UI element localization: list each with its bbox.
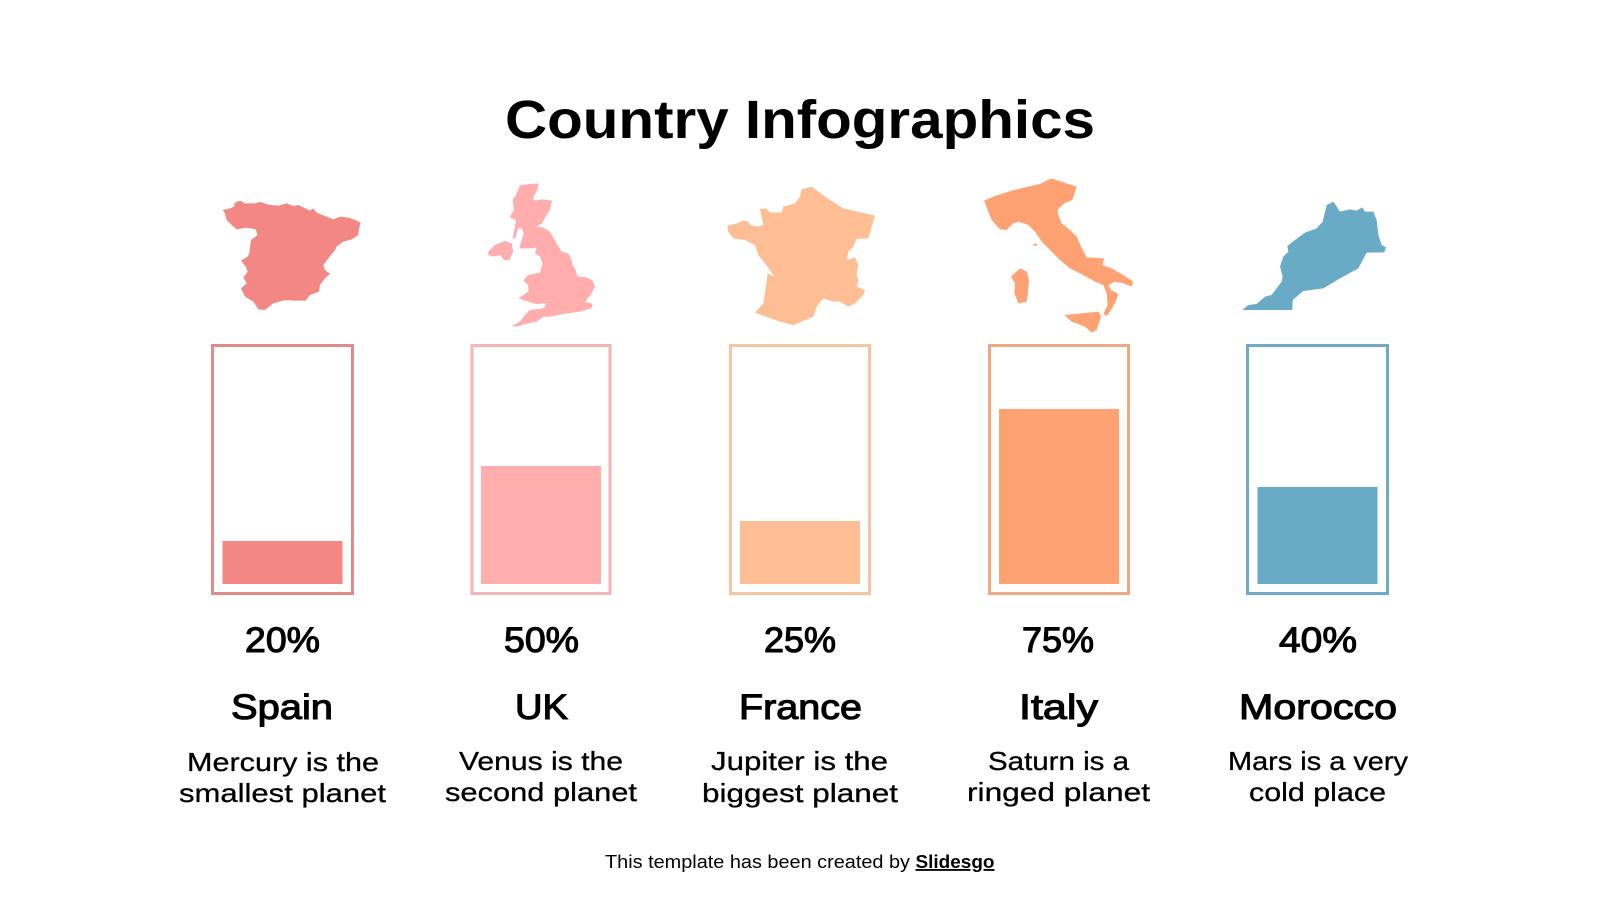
description: Spain [179,747,387,808]
name: France: France [739,688,862,727]
footer credit: Slidesgo [916,851,994,872]
description: Morocco [1228,746,1408,807]
name: UK: UK [515,688,568,727]
value: Spain: 20% [245,621,320,660]
description: France: Jupiter is the [711,746,888,776]
description: UK [445,746,638,807]
value: Italy: 75% [1022,621,1094,660]
description: UK: second planet [445,777,638,807]
panel: France [702,187,899,808]
bar frame: France [730,346,870,594]
bar frame: Italy [990,346,1128,594]
bar frame: UK [472,346,610,594]
description: Spain: smallest planet [179,778,387,808]
panel: UK [445,183,638,807]
name: Spain: Spain [231,688,333,727]
title: Country Infographics [505,90,1095,150]
description: France [702,746,899,808]
panel: Spain [179,201,387,808]
value: France: 25% [764,621,836,660]
bar fill: UK 50% [481,466,601,584]
description: Italy: Saturn is a [988,746,1130,776]
bar fill: Italy 75% [999,409,1119,584]
name: Morocco: Morocco [1239,688,1397,727]
value: Morocco: 40% [1279,621,1357,660]
description: Morocco: Mars is a very [1228,746,1408,776]
bar fill: Morocco 40% [1258,487,1378,584]
description: Morocco: cold place [1249,777,1386,807]
bar frame: Morocco [1248,346,1388,594]
panel: Morocco [1228,202,1408,807]
footer credit: This template has been created by [605,851,911,872]
description: France: biggest planet [702,778,899,808]
icon: France map [727,187,875,325]
description: Italy [967,746,1151,807]
bar frame: Spain [212,346,352,594]
icon: Morocco map [1242,202,1386,310]
description: UK: Venus is the [459,746,623,776]
icon: Spain map [223,201,361,310]
icon: UK map [488,183,595,327]
bar fill: Spain 20% [222,541,342,584]
icon: Italy map [984,178,1133,333]
bar fill: France 25% [740,521,860,584]
panel: Italy [967,178,1151,807]
value: UK: 50% [504,621,579,660]
description: Italy: ringed planet [967,777,1151,807]
name: Italy: Italy [1019,688,1099,727]
description: Spain: Mercury is the [187,747,379,777]
